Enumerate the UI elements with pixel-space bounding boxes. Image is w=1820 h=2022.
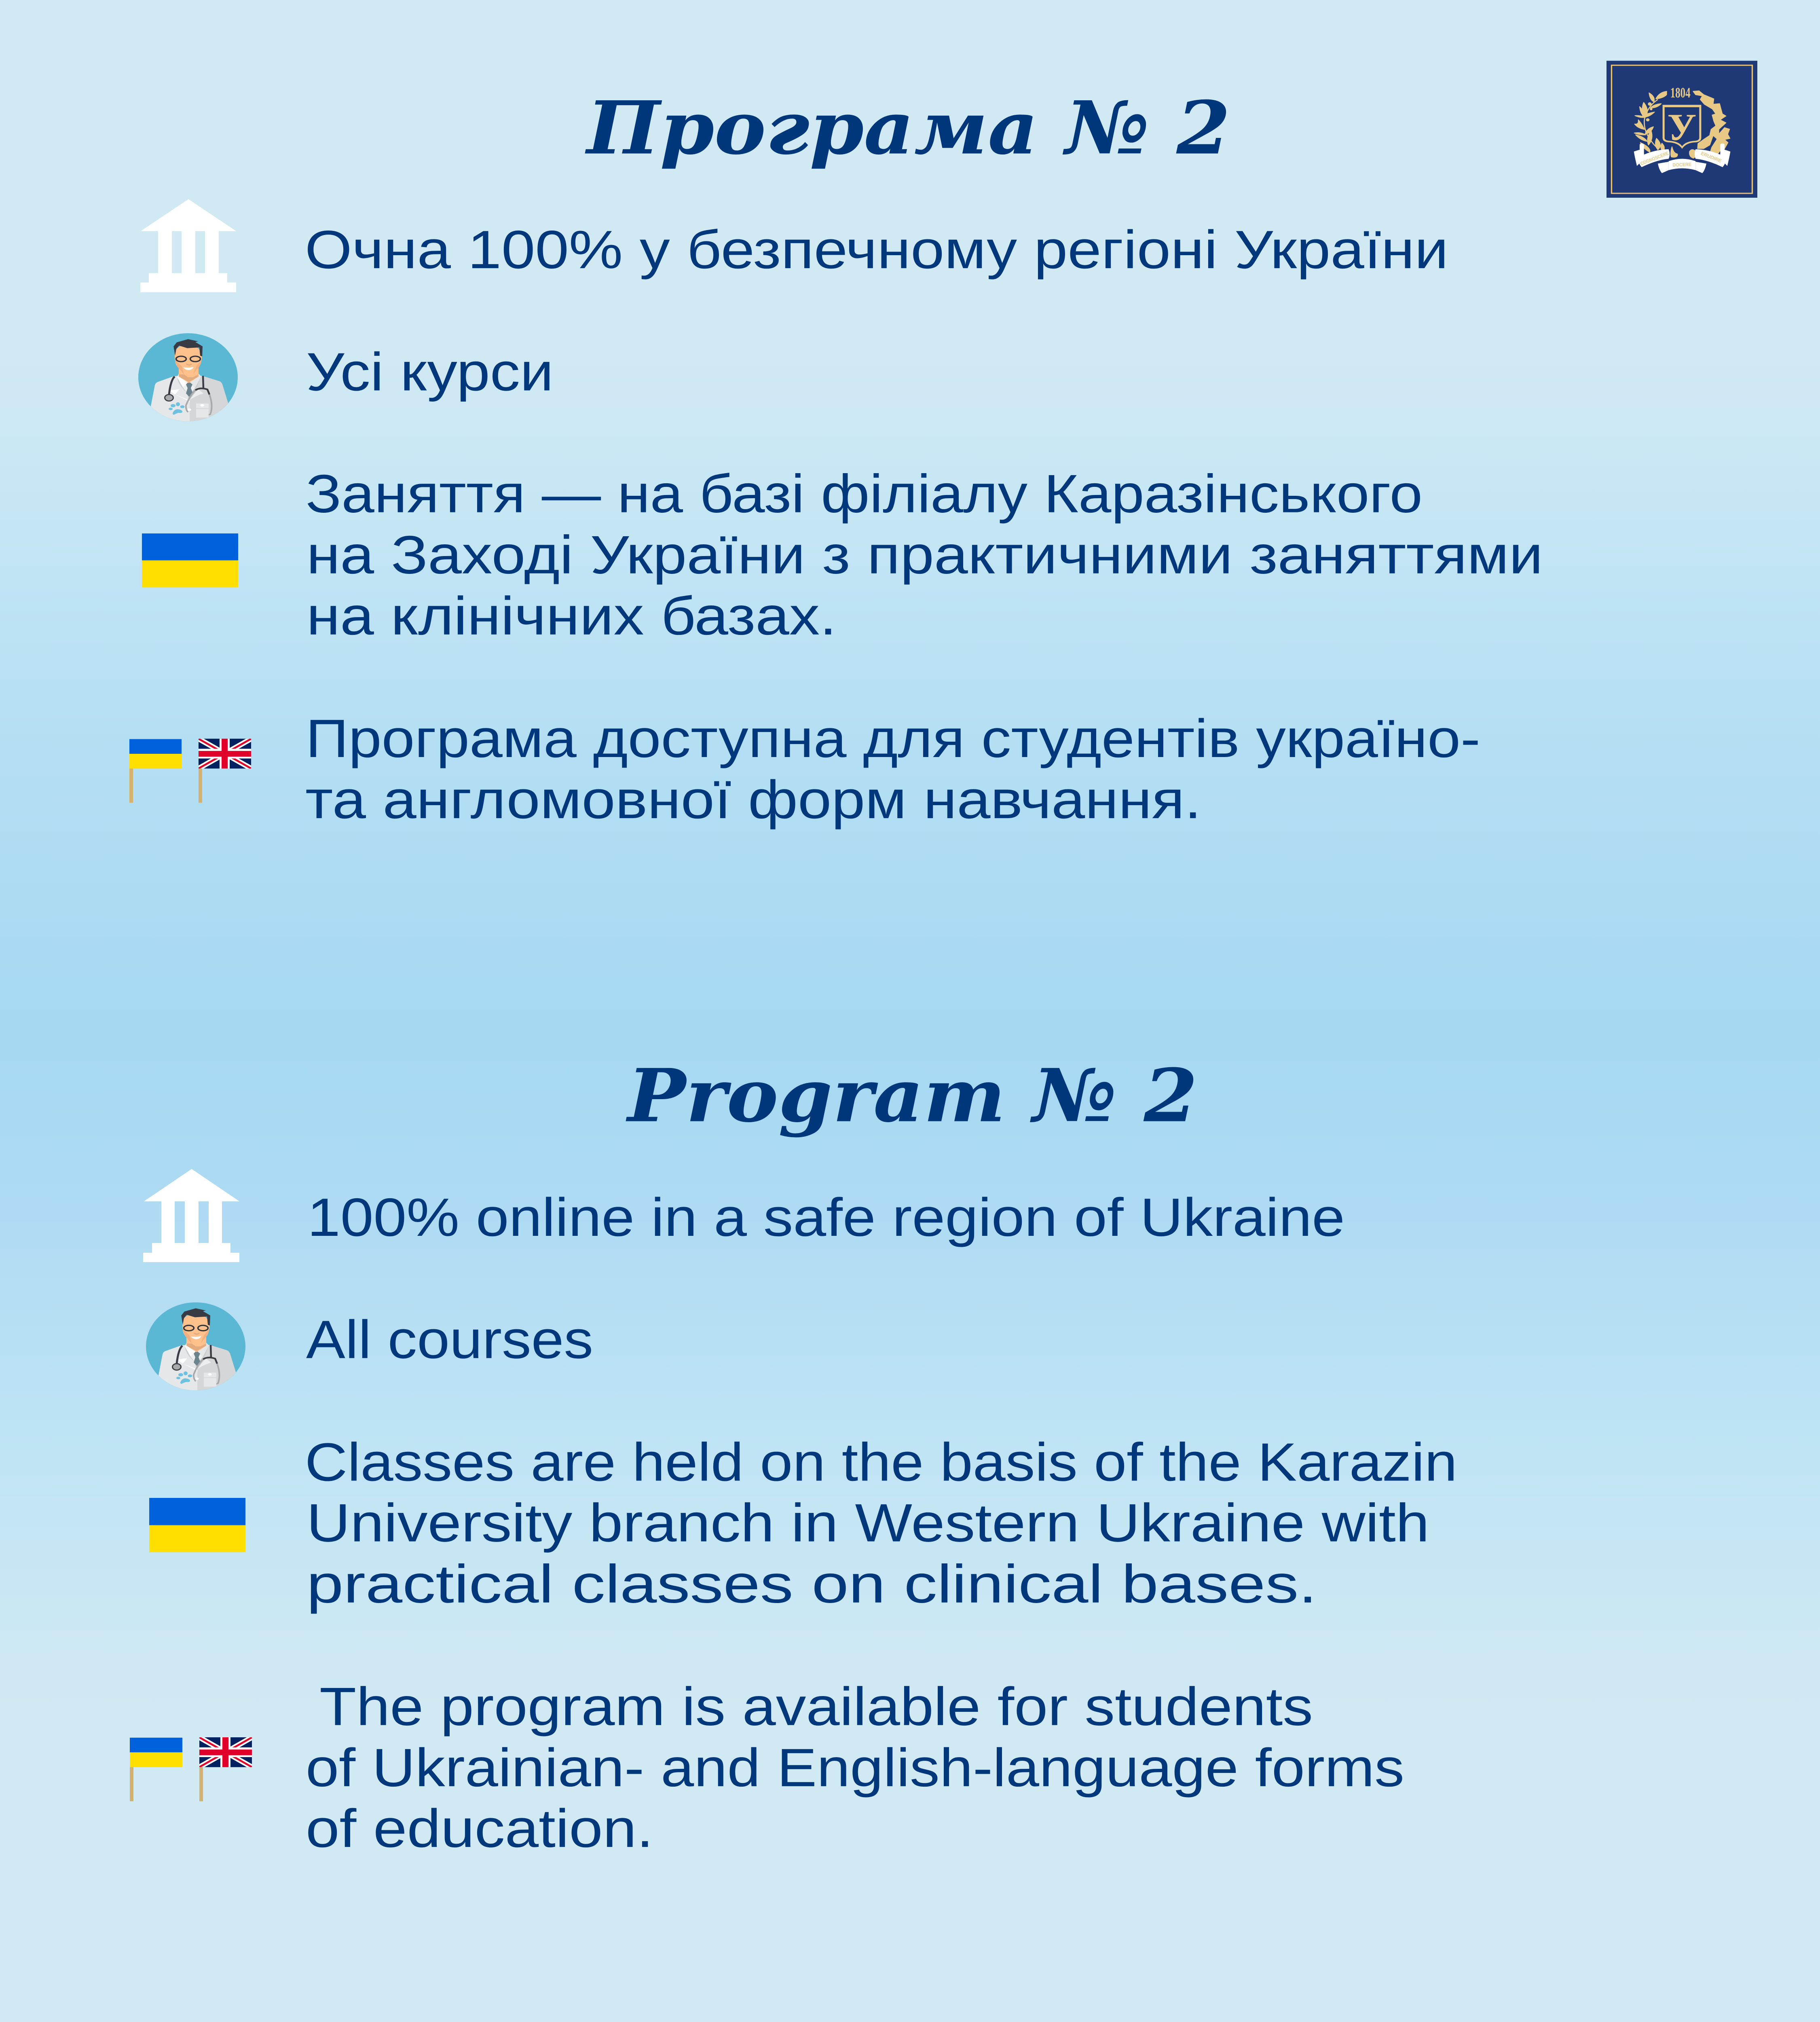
text: online study: 100% online in a safe region of Ukraine: [307, 1188, 1345, 1248]
university logo: [1607, 61, 1757, 198]
text: classes location: University branch in Western Ukraine with: [307, 1493, 1429, 1553]
text: classes location: Заняття — на базі філіалу Каразінського: [306, 464, 1423, 524]
text: classes location: на Заході України з практичними заняттями: [307, 525, 1543, 585]
icon: university building: [143, 1169, 239, 1262]
text: language forms: та англомовної форм навчання.: [305, 770, 1201, 830]
text: all courses: All courses: [306, 1310, 593, 1370]
university logo: COGNOSCERE: [1640, 150, 1670, 166]
icon: university building: [140, 199, 236, 292]
icon: Ukrainian flag: [149, 1498, 245, 1552]
icon: doctor: [146, 1302, 245, 1393]
university logo: ERUDIRE: [1700, 151, 1723, 164]
text: language forms: The program is available for students: [319, 1677, 1313, 1737]
text: classes location: [306, 464, 1543, 646]
icon: small UK flag on pole: [197, 738, 253, 803]
icon: small Ukrainian flag on pole: [130, 1738, 182, 1801]
text: language forms: Програма доступна для студентів україно-: [306, 709, 1480, 769]
panel: English programme: [130, 1053, 1457, 1859]
university logo: 1804: [1670, 85, 1691, 101]
icon: small UK flag on pole: [197, 1736, 254, 1801]
heading: English: Program № 2: [626, 1053, 1198, 1139]
icon: doctor: [138, 333, 238, 424]
text: classes location: на клінічних базах.: [307, 586, 837, 646]
text: classes location: [305, 1432, 1457, 1614]
university logo: У: [1667, 106, 1696, 148]
text: language forms: [306, 1677, 1404, 1859]
heading: Ukrainian: Програма № 2: [585, 85, 1230, 171]
panel: Ukrainian programme: [129, 85, 1543, 830]
text: classes location: Classes are held on the basis of the Karazin: [305, 1432, 1457, 1492]
university logo: DOCERE: [1672, 162, 1691, 168]
icon: small Ukrainian flag on pole: [129, 739, 182, 803]
text: classes location: practical classes on clinical bases.: [307, 1554, 1317, 1614]
icon: Ukrainian flag: [142, 533, 238, 587]
text: all courses: Усі курси: [306, 342, 554, 402]
text: language forms: [305, 709, 1480, 830]
text: language forms: of Ukrainian- and English-language forms: [306, 1738, 1404, 1798]
text: language forms: of education.: [306, 1799, 653, 1859]
text: full-time study: Очна 100% у безпечному регіоні України: [305, 220, 1448, 280]
